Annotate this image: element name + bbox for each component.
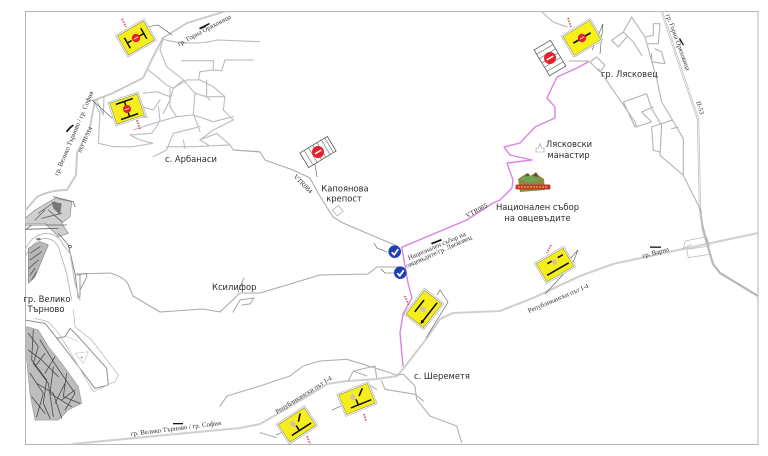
label: Sheremetya: с. Шереметя — [414, 371, 470, 381]
road label: Gorna Oryahovitsa north: гр. Горна Оряховица — [177, 14, 233, 48]
road: III-514 — [26, 11, 226, 210]
sign: Lyaskovets detour — [561, 19, 603, 57]
town: Veliko Tarnovo river loop — [25, 233, 80, 300]
label: national gathering: Национален събор — [496, 202, 579, 212]
road: Ksilifor — [77, 267, 400, 312]
sign: mandatory direction upper — [388, 245, 401, 258]
sign: Arbanasi closure — [108, 92, 146, 126]
sign: village west — [337, 382, 377, 416]
road label: II-53: II-53 — [694, 100, 705, 116]
town: Veliko Tarnovo south quarter — [25, 310, 118, 420]
label: Lyaskovski monastery: Лясковски — [546, 139, 592, 149]
sign: I-4 east — [534, 246, 576, 284]
label: Kapoyanova fortress: Капоянова — [321, 184, 369, 194]
roads: Sheremetya village — [260, 359, 462, 443]
label: Kapoyanova fortress: крепост — [326, 194, 362, 204]
road label: Varna: гр. Варна — [642, 246, 670, 260]
label: Veliko Tarnovo: Търново — [26, 304, 65, 314]
label: Ksilifor: Ксилифор — [212, 282, 256, 292]
sign: mandatory direction lower — [394, 266, 407, 279]
road label: Veliko Tarnovo / Sofia south: гр. Велико Търново / гр. София — [130, 420, 221, 438]
road label: direction to gathering: Национален събор на — [407, 231, 467, 262]
roads: Lyaskovets town — [590, 17, 702, 212]
road label: I-4 west: Републикански път I-4 — [274, 375, 334, 416]
icon: monastery — [536, 144, 544, 152]
barrier: Lyaskovets — [534, 40, 566, 76]
roads: Arbanasi village — [93, 38, 260, 157]
interchange — [682, 237, 710, 258]
label: Veliko Tarnovo: гр. Велико — [24, 294, 70, 304]
road label: VTR084: VTR084 — [292, 173, 314, 196]
barrier: VTR084 — [300, 136, 336, 168]
sign: top detour — [115, 19, 157, 57]
town: Veliko Tarnovo north quarter — [25, 197, 87, 298]
road: I-4 — [72, 233, 758, 444]
road label: VTR085: VTR085 — [465, 202, 489, 220]
road label: Veliko Tarnovo / Sofia north: гр. Велико Търново / гр. София — [53, 90, 95, 177]
road label: direction to Lyaskovets: овцевъдите/гр. Лясковец — [405, 234, 473, 270]
road label: I-4 east: Републикански път I-4 — [527, 283, 590, 315]
road: VTR084 — [233, 150, 397, 246]
red sign annotations — [122, 18, 571, 444]
label: Lyaskovski monastery: манастир — [547, 150, 590, 160]
road: north of Lyaskovets — [542, 12, 567, 27]
road: II-53 — [662, 12, 758, 296]
sign: Sheremetya junction — [404, 288, 444, 330]
logo: national gathering — [516, 172, 550, 192]
icon: Kapoyanova fortress — [332, 205, 343, 216]
road label: III-514: път III-514 — [77, 126, 94, 154]
road: western branch — [220, 386, 260, 406]
road: east bypass branch — [704, 226, 752, 292]
sign: I-4 west — [276, 406, 318, 444]
leader lines — [92, 24, 603, 435]
detour route — [400, 62, 588, 366]
label: Arbanasi: с. Арбанаси — [165, 154, 217, 164]
label: national gathering: на овцевъдите — [504, 213, 571, 223]
direction arrows — [66, 23, 684, 424]
road label: Gorna Oryahovitsa east: гр. Горна Оряховица — [664, 13, 691, 72]
label: Lyaskovets: гр. Лясковец — [601, 69, 658, 79]
